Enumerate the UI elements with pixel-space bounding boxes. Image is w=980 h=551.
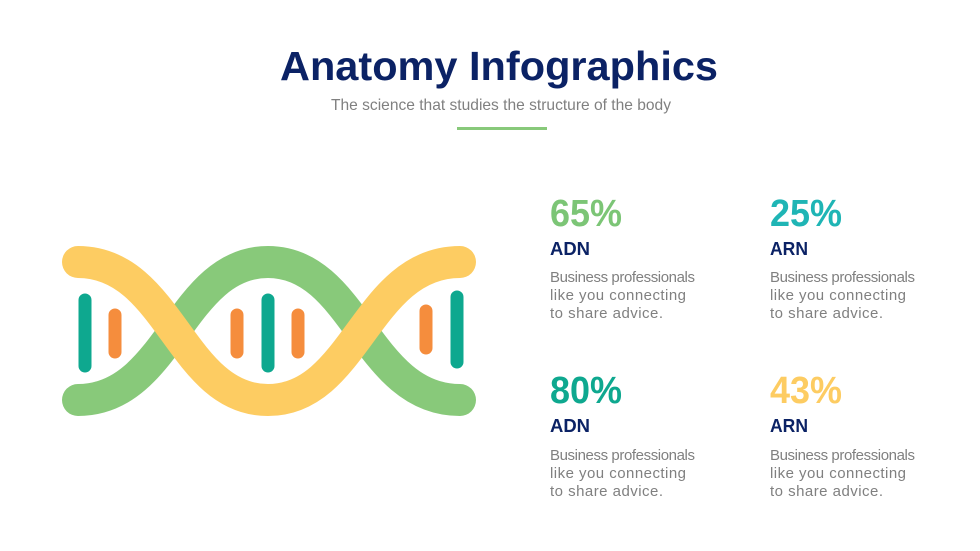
stat block: 43% ARN: to share advice. bbox=[770, 483, 883, 500]
stat block: 65% ADN bbox=[550, 193, 695, 322]
stat block: 25% ARN: Business professionals bbox=[770, 269, 915, 286]
stat block: 80% ADN: like you connecting bbox=[550, 465, 686, 482]
subtitle: The science that studies the structure of the body bbox=[331, 97, 671, 114]
green strand bbox=[78, 262, 460, 400]
stat block: 43% ARN: Business professionals bbox=[770, 447, 915, 464]
stat block: 43% ARN: ARN bbox=[770, 416, 808, 436]
stat block: 25% ARN: 25% bbox=[770, 193, 842, 235]
stat block: 65% ADN: 65% bbox=[550, 193, 622, 235]
stat block: 65% ADN: ADN bbox=[550, 239, 590, 259]
stat block: 65% ADN: like you connecting bbox=[550, 287, 686, 304]
stat block: 25% ARN: to share advice. bbox=[770, 305, 883, 322]
stat block: 43% ARN: 43% bbox=[770, 370, 842, 412]
yellow strand bbox=[78, 262, 460, 400]
dna rungs bbox=[85, 297, 457, 366]
stat block: 80% ADN: ADN bbox=[550, 416, 590, 436]
stat block: 80% ADN: Business professionals bbox=[550, 447, 695, 464]
stat block: 65% ADN: to share advice. bbox=[550, 305, 663, 322]
stat block: 25% ARN: like you connecting bbox=[770, 287, 906, 304]
stat block: 43% ARN: like you connecting bbox=[770, 465, 906, 482]
title: Anatomy Infographics bbox=[280, 43, 718, 89]
stat block: 25% ARN bbox=[770, 193, 915, 322]
stat block: 80% ADN: 80% bbox=[550, 370, 622, 412]
title underline bbox=[457, 127, 547, 130]
stat block: 25% ARN: ARN bbox=[770, 239, 808, 259]
stat block: 80% ADN: to share advice. bbox=[550, 483, 663, 500]
stat block: 65% ADN: Business professionals bbox=[550, 269, 695, 286]
stat block: 80% ADN bbox=[550, 370, 695, 500]
dna helix illustration bbox=[78, 262, 460, 400]
stat block: 43% ARN bbox=[770, 370, 915, 500]
